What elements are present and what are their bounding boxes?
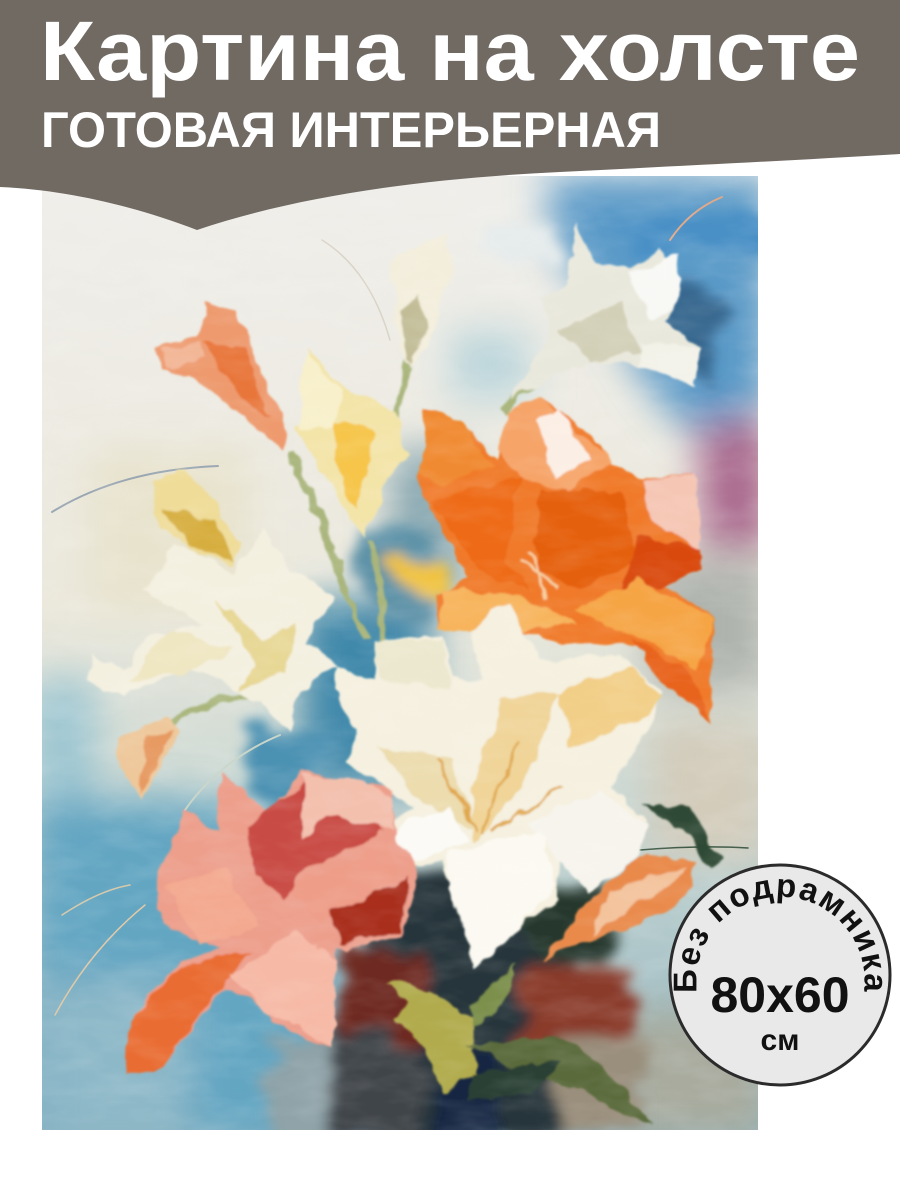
badge: without stretcher, 80x60 cm [668, 864, 892, 1086]
leaves [385, 803, 722, 1130]
title: Картина на холсте [40, 4, 860, 98]
flower: white top right [510, 220, 700, 400]
canvas brush texture [42, 176, 758, 1130]
badge: without stretcher, 80x60 cm: 80х60 [710, 967, 850, 1023]
flower: big orange [420, 395, 715, 725]
flower: small peach bud [120, 717, 178, 800]
painting background [30, 176, 770, 1140]
subtitle: ГОТОВАЯ ИНТЕРЬЕРНАЯ [41, 102, 661, 158]
painting strokes [52, 197, 748, 1015]
flower: peach bud [155, 302, 285, 450]
flower: orange lower right [540, 855, 695, 960]
banner [0, 0, 900, 230]
painting: abstract floral canvas [30, 176, 770, 1140]
badge: without stretcher, 80x60 cm: см [761, 1024, 799, 1057]
flower: large white lily [335, 605, 665, 965]
flower: cream lily [85, 530, 335, 730]
flower: white bud [392, 232, 452, 368]
stems [170, 360, 560, 725]
flower: pink red lily [125, 770, 420, 1075]
flower: yellow [295, 350, 410, 540]
badge: without stretcher, 80x60 cm: Без подрамника [674, 879, 882, 992]
flower: yellow bud [150, 470, 242, 568]
